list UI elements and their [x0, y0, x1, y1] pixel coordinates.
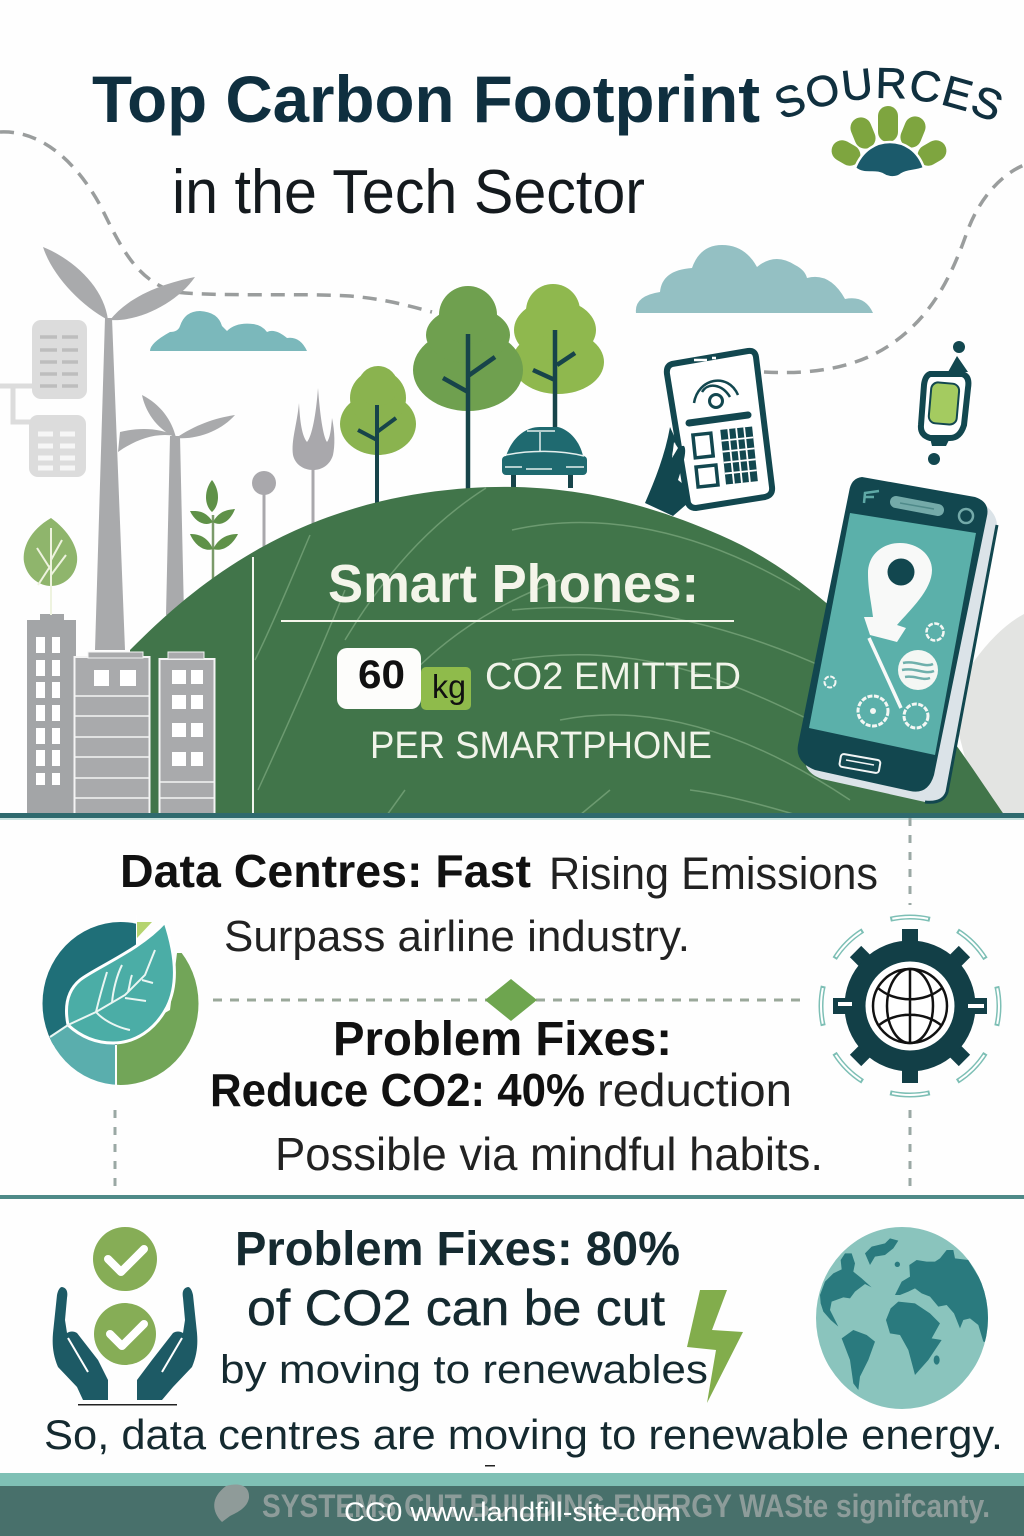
icon: lightning bolt — [687, 1290, 743, 1403]
title: Top Carbon Footprint — [92, 62, 760, 136]
heading: smart phones: Smart Phones: — [328, 554, 699, 614]
moving to renewables: by moving to renewables — [220, 1348, 708, 1392]
building A with leaf tree — [24, 518, 77, 815]
smartphone with map pin — [798, 477, 997, 803]
icon: hands with checks — [53, 1227, 197, 1406]
phone screen — [809, 513, 976, 755]
hill contour lines — [255, 488, 850, 816]
title — [92, 62, 760, 227]
footer credit: CC0 www.landfill-site.com — [344, 1497, 681, 1527]
building B — [74, 652, 150, 815]
server blocks — [0, 320, 87, 477]
phone side edge — [806, 505, 997, 803]
reduce co2 line — [210, 1064, 792, 1116]
dashed route left — [0, 132, 432, 312]
problem fixes 80 percent: Problem Fixes: 80% — [235, 1223, 680, 1276]
right hand — [137, 1287, 197, 1400]
badge: 60: 60 — [358, 653, 405, 697]
grey hill right — [950, 614, 1024, 815]
data centres heading: Data Centres: Fast — [120, 845, 531, 897]
problem fixes heading: Problem Fixes: — [333, 1013, 672, 1066]
cloud right — [636, 245, 873, 313]
hand holding tablet — [645, 351, 772, 516]
car — [502, 427, 587, 488]
lollipop tree — [252, 471, 276, 553]
data centres heading — [120, 845, 878, 899]
divider top — [0, 813, 1024, 820]
mindful habits line: Possible via mindful habits. — [275, 1128, 823, 1180]
tree B — [413, 286, 523, 490]
vertical dashed connectors — [115, 818, 910, 1195]
badge: kg — [421, 667, 471, 710]
wearable gadget — [921, 341, 968, 465]
reduce co2 line: reduction — [597, 1064, 792, 1116]
badge: 60 — [337, 648, 421, 709]
dashed divider with diamond — [213, 979, 805, 1021]
footer band — [0, 1473, 1024, 1536]
phone body — [798, 477, 988, 792]
icon: leaf in circle — [42, 922, 198, 1085]
data centres heading: Rising Emissions — [549, 848, 878, 899]
plant sprout — [190, 480, 238, 582]
building C — [160, 652, 215, 815]
wind turbine small — [118, 395, 235, 615]
stat label second line: PER SMARTPHONE — [370, 725, 712, 767]
icon: fan of leaves — [828, 106, 950, 177]
stat label: CO2 EMITTED — [485, 656, 741, 698]
footer ghost leaf — [214, 1484, 249, 1522]
green hill — [130, 487, 1005, 816]
icon: gear with globe — [821, 917, 999, 1095]
data centres text: Surpass airline industry. — [224, 912, 690, 961]
badge: kg: kg — [432, 668, 466, 705]
tree A — [340, 366, 416, 507]
icon: globe — [816, 1227, 992, 1409]
curved word: sources: SOURCES — [776, 68, 1002, 120]
cloud left — [150, 311, 307, 351]
dashed route right — [764, 165, 1024, 373]
reduce co2 line: Reduce CO2: 40% — [210, 1064, 585, 1116]
left hand — [53, 1287, 108, 1400]
divider middle — [0, 1195, 1024, 1199]
title: in the Tech Sector — [172, 158, 645, 227]
tree C — [512, 284, 604, 428]
panel: smart phones stat — [281, 554, 741, 767]
fork shaped tree — [293, 388, 334, 530]
co2 can be cut: of CO2 can be cut — [247, 1280, 665, 1336]
wind turbine large — [43, 247, 195, 650]
map pin — [864, 543, 932, 642]
closing statement: So, data centres are moving to renewable energy. — [44, 1411, 1003, 1458]
